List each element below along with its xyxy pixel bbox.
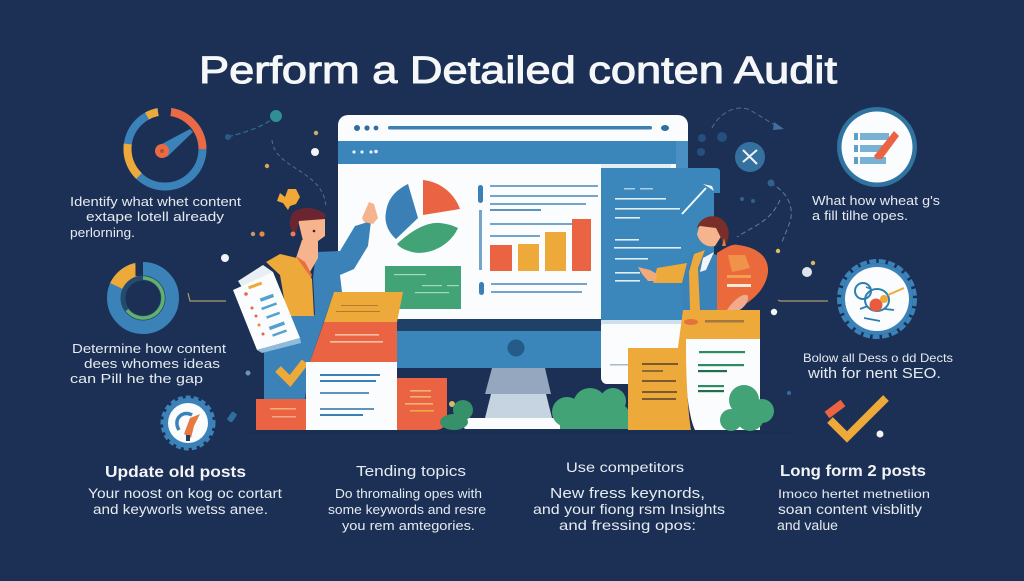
icon: small scissors badge [735,142,765,172]
title: Perform a Detailed conten Audit [199,50,838,92]
column: use competitors: Use competitors [566,460,684,475]
column: use competitors: New fress keynords, [550,485,705,502]
checkmark [278,362,305,381]
person: left presenter [233,202,378,399]
bushes [440,388,630,430]
document stack: right [628,310,774,431]
column: long form posts: Imoco hertet metnetiion [778,487,930,501]
baseline [245,431,795,434]
icon: gauge [127,106,202,186]
hand [362,202,378,224]
text block: what how: What how wheat g's [812,193,941,208]
shield [717,245,768,310]
green note box [385,266,461,309]
text block: seo [803,351,953,382]
column: use competitors: and your fiong rsm Insights [533,501,725,517]
column: update old posts: and keyworls wetss anee. [93,502,268,517]
blue body and raised arm [264,221,371,399]
text block: seo: with for nent SEO. [807,365,941,382]
hand [638,267,657,281]
text block: determine [70,341,226,386]
chart: pie [385,180,460,253]
column: trending topics: Tending topics [356,464,466,480]
column: trending topics: you rem amtegories. [342,518,475,533]
column: update old posts [88,464,282,517]
neck [296,240,318,272]
text block: identify: Identify what whet content [70,194,241,209]
blue document panel [601,141,720,384]
column: long form posts [777,463,930,533]
arm [653,263,687,283]
hair [290,208,325,233]
torso [680,250,717,310]
bar chart and text lines [478,185,598,295]
head [697,224,722,246]
icon: checklist with pencil [837,107,917,187]
column: long form posts: soan content visblitly [778,502,922,517]
column: long form posts: and value [777,518,838,533]
arrow: right connector [778,300,828,301]
icon: checkmark [827,398,886,437]
text block: identify: perlorning. [70,225,135,240]
icon: donut chart [114,262,172,327]
text block: seo: Bolow all Dess o dd Dects [803,351,953,365]
text block: what how: a fill tilhe opes. [812,208,908,223]
column: trending topics: Do thromaling opes with [335,486,482,501]
orange jacket [266,254,314,316]
text block: determine: dees whomes ideas [84,356,221,371]
text block: determine: Determine how content [72,341,226,356]
document stack: left [256,292,447,430]
icon: update gear badge [162,397,214,449]
column: long form posts: Long form 2 posts [780,463,926,480]
text block: identify [70,194,241,240]
text block: determine: can Pill he the gap [70,371,203,386]
column: trending topics [328,464,486,533]
text block: what how [812,193,941,223]
person: right presenter [638,216,768,312]
icon: SEO gear badge [839,261,915,337]
column: update old posts: Your noost on kog oc cortart [88,486,282,501]
arrow: left connector [188,293,226,301]
paper in hand [233,265,301,353]
monitor [338,115,688,429]
column: trending topics: some keywords and resre [328,502,486,517]
column: update old posts: Update old posts [105,464,246,481]
text block: identify: extape lotell already [86,209,225,224]
decorative dots and dashed paths [221,108,884,438]
column: use competitors [533,460,725,533]
column: use competitors: and fressing opos: [559,517,696,533]
face [298,218,325,244]
